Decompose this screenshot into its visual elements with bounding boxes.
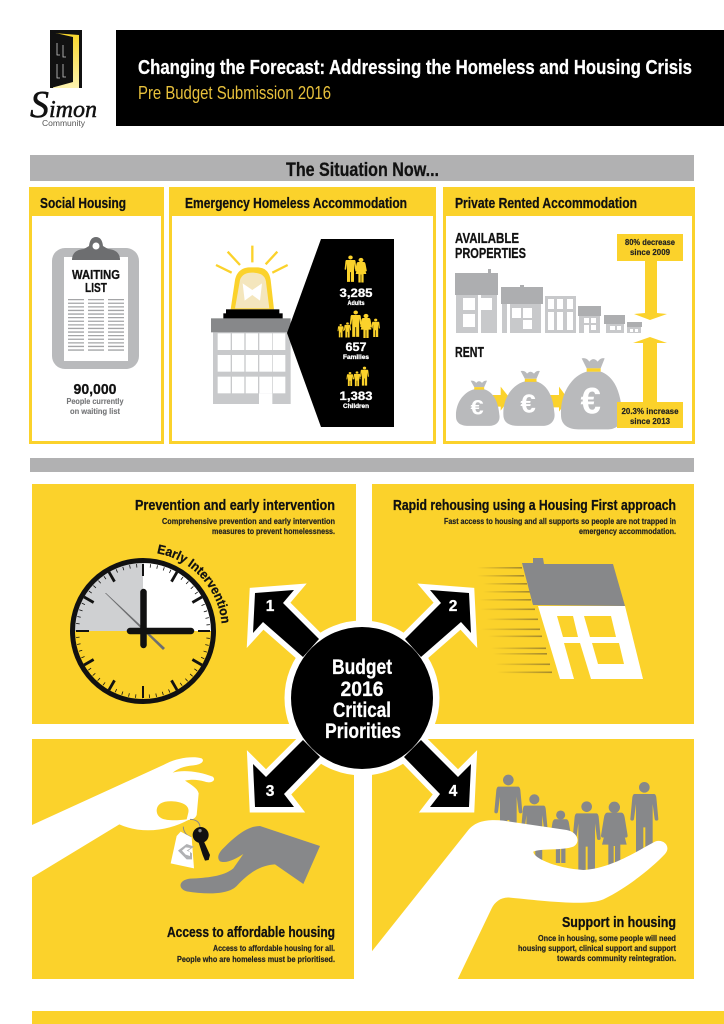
arrow: rent increase bbox=[617, 337, 683, 428]
hub label bbox=[325, 656, 401, 743]
icon: shrinking row of houses bbox=[455, 269, 642, 333]
body text: prevention: Comprehensive prevention and early intervention bbox=[162, 517, 335, 526]
icon: clipboard waiting list bbox=[52, 237, 139, 369]
hub label: Budget bbox=[332, 656, 392, 679]
arrow: properties decrease: since 2009 bbox=[630, 248, 671, 257]
arrow numbers: 1 bbox=[266, 598, 275, 615]
body text: affordable housing: People who are homeless must be prioritised. bbox=[177, 955, 335, 964]
icon: adults bbox=[345, 256, 367, 282]
logo: Simon Community: Simon bbox=[30, 84, 97, 126]
heading: support in housing: Support in housing bbox=[562, 915, 676, 931]
body text: rapid rehousing: Fast access to housing and all supports so people are not trapped in bbox=[444, 517, 676, 526]
caption: people on waiting list: on waiting list bbox=[70, 407, 120, 416]
body text: affordable housing bbox=[177, 944, 335, 964]
heading: private rented: Private Rented Accommodation bbox=[455, 195, 637, 212]
arrow: rent increase: 20.3% increase bbox=[622, 407, 679, 416]
panel 4: support in housing bbox=[370, 739, 694, 980]
stat: 90,000: 90,000 bbox=[74, 381, 116, 398]
arrow numbers: 3 bbox=[266, 783, 275, 800]
panel: emergency homeless accommodation bbox=[169, 187, 436, 442]
logo: Simon Community bbox=[30, 30, 97, 128]
hub label: 2016 bbox=[340, 678, 384, 701]
illustration: people held in open hand bbox=[370, 775, 667, 980]
label: available properties: AVAILABLE bbox=[455, 231, 519, 247]
arrow: rent increase: since 2013 bbox=[630, 417, 671, 426]
icon: growing money bags bbox=[456, 358, 622, 429]
logo: Simon Community: Community bbox=[42, 119, 85, 128]
stat: adults bbox=[340, 286, 373, 307]
icon: speeding house bbox=[477, 558, 643, 679]
icon: families bbox=[338, 311, 380, 338]
arrow: properties decrease bbox=[617, 234, 683, 320]
heading: emergency accommodation: Emergency Homeless Accommodation bbox=[185, 195, 407, 212]
section heading: The Situation Now bbox=[30, 155, 694, 181]
black stats callout bbox=[287, 239, 394, 427]
heading: affordable housing: Access to affordable housing bbox=[167, 925, 335, 941]
stat: children bbox=[340, 389, 373, 410]
hub label: Critical bbox=[333, 699, 391, 722]
section heading: The Situation Now: The Situation Now... bbox=[286, 160, 439, 181]
panel: private rented accommodation bbox=[443, 187, 695, 442]
body text: support in housing: housing support, clinical support and support bbox=[518, 944, 676, 953]
arrow numbers: 4 bbox=[449, 783, 458, 800]
stat: families bbox=[343, 340, 370, 361]
stat: children: 1,383 bbox=[340, 389, 373, 403]
heading: prevention: Prevention and early intervention bbox=[135, 498, 335, 514]
body text: support in housing bbox=[518, 934, 676, 963]
central hub: budget priorities with four arrows bbox=[253, 590, 471, 807]
caption: people on waiting list bbox=[66, 397, 124, 416]
arrow numbers bbox=[266, 598, 458, 800]
body text: affordable housing: Access to affordable housing for all. bbox=[213, 944, 335, 953]
panel 2: rapid rehousing bbox=[372, 484, 694, 724]
panel 3: access to affordable housing bbox=[32, 739, 354, 979]
icon: clipboard waiting list: WAITING bbox=[72, 267, 120, 282]
chart: clock face bbox=[72, 560, 214, 702]
icon: children bbox=[346, 367, 369, 386]
label: rent: RENT bbox=[455, 345, 484, 361]
curved label: early intervention: Early Intervention bbox=[157, 544, 228, 624]
body text: prevention bbox=[162, 517, 335, 536]
caption: people on waiting list: People currently bbox=[66, 397, 124, 406]
icon: growing money bags: € bbox=[580, 380, 601, 421]
body text: prevention: measures to prevent homelessness. bbox=[212, 527, 335, 536]
label: available properties bbox=[455, 231, 526, 262]
body text: support in housing: Once in housing, some people will need bbox=[538, 934, 676, 943]
label: available properties: PROPERTIES bbox=[455, 246, 526, 262]
subtitle: Pre Budget Submission 2016 bbox=[138, 83, 331, 103]
arrow: properties decrease: 80% decrease bbox=[625, 238, 676, 247]
body text: rapid rehousing bbox=[444, 517, 676, 536]
icon: growing money bags: € bbox=[520, 389, 536, 418]
heading: rapid rehousing: Rapid rehousing using a Housing First approach bbox=[393, 498, 676, 514]
panel: social housing bbox=[29, 187, 164, 442]
illustration: hands passing key bbox=[32, 757, 320, 893]
icon: siren on building bbox=[211, 246, 291, 404]
stat: families: Families bbox=[343, 355, 370, 361]
header banner bbox=[116, 30, 724, 126]
heading: social housing: Social Housing bbox=[40, 195, 126, 212]
stat: adults: Adults bbox=[348, 301, 365, 307]
icon: growing money bags: € bbox=[470, 396, 484, 419]
hub label: Priorities bbox=[325, 720, 401, 743]
bottom yellow band bbox=[32, 1011, 724, 1024]
body text: rapid rehousing: emergency accommodation. bbox=[579, 527, 676, 536]
stat: children: Children bbox=[343, 404, 369, 410]
stat: adults: 3,285 bbox=[340, 286, 373, 300]
stat: families: 657 bbox=[346, 340, 367, 354]
divider bar bbox=[30, 458, 694, 472]
panel 1: prevention and early intervention bbox=[32, 484, 356, 724]
body text: support in housing: towards community reintegration. bbox=[557, 954, 676, 963]
arrow numbers: 2 bbox=[449, 598, 457, 615]
icon: clipboard waiting list: LIST bbox=[85, 280, 107, 295]
